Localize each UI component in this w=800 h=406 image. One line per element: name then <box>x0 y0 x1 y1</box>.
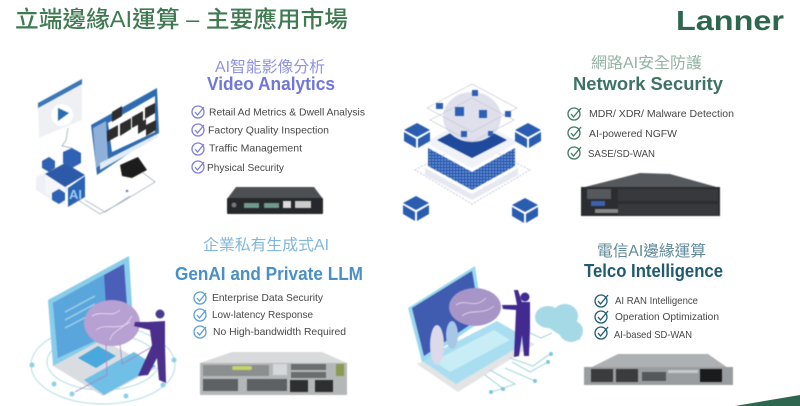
play panel <box>38 79 82 138</box>
device: 2U edge server <box>200 352 347 395</box>
logo: Lanner: Lanner <box>676 5 784 36</box>
item 2: AI-powered NGFW <box>589 128 677 140</box>
laptop base <box>53 338 157 396</box>
illustration: network security <box>403 84 541 223</box>
ring nodes <box>30 358 176 398</box>
keyboard <box>84 352 156 395</box>
heading zh: 網路AI安全防護 <box>591 54 703 72</box>
wire planes <box>427 84 517 142</box>
list <box>595 295 719 341</box>
corner cube 3 <box>403 196 429 221</box>
panel: GenAI <box>30 236 363 404</box>
item 3: No High-bandwidth Required <box>213 326 346 338</box>
item 1: MDR/ XDR/ Malware Detection <box>589 108 734 120</box>
laptop shadow <box>417 330 535 392</box>
panel: network security <box>403 54 734 223</box>
title: 立端邊緣AI運算 – 主要應用市場 <box>15 6 348 32</box>
keys <box>434 330 510 372</box>
orbit rings <box>31 326 175 404</box>
item 2: Factory Quality Inspection <box>208 124 329 136</box>
heading zh: 電信AI邊緣運算 <box>597 242 706 260</box>
circuit lines <box>62 128 155 214</box>
cloud <box>535 304 583 342</box>
device: edge appliance <box>227 187 323 214</box>
item 2: Low-latency Response <box>212 309 313 321</box>
floating cubes <box>436 90 511 137</box>
keyboard deck <box>421 321 530 384</box>
panel: video analytics <box>36 58 365 214</box>
item 3: SASE/SD-WAN <box>588 148 655 160</box>
item 1: AI RAN Intelligence <box>615 295 698 307</box>
corner cube 2 <box>515 123 541 148</box>
device: 1U telco server <box>584 354 733 385</box>
heading zh: 企業私有生成式AI <box>203 236 329 254</box>
heading en: GenAI and Private LLM <box>175 264 363 284</box>
illustration: GenAI <box>30 256 176 404</box>
screen <box>408 266 483 365</box>
touchpad <box>78 346 116 368</box>
item 3: AI-based SD-WAN <box>614 329 692 341</box>
corner accent <box>735 395 800 406</box>
item 1: Enterprise Data Security <box>212 292 324 304</box>
monitor <box>91 88 159 178</box>
heading en: Network Security <box>573 74 723 94</box>
heading zh: AI智能影像分析 <box>215 58 325 76</box>
list <box>194 292 346 338</box>
device: rack network appliance <box>581 173 720 216</box>
item 3 <box>568 147 655 160</box>
heading en: Telco Intelligence <box>584 261 723 281</box>
base dashed ring <box>415 140 530 204</box>
illustration: video analytics <box>36 79 159 214</box>
screen <box>48 256 133 366</box>
item 3: Traffic Management <box>209 142 302 154</box>
brain <box>75 300 150 392</box>
circuit lines <box>485 333 553 394</box>
AI cube: AI <box>69 187 82 202</box>
panel: telco <box>408 242 733 394</box>
person <box>134 310 166 383</box>
person <box>502 290 530 357</box>
brain <box>449 288 501 326</box>
item 1: Retail Ad Metrics & Dwell Analysis <box>209 106 365 118</box>
corner cube 1 <box>404 123 430 148</box>
brain <box>443 92 501 142</box>
item 2: Operation Optimization <box>615 311 719 323</box>
heading en: Video Analytics <box>207 74 335 94</box>
corner cube 4 <box>512 198 538 223</box>
server block <box>425 117 518 200</box>
list <box>568 108 734 160</box>
list <box>192 106 365 174</box>
illustration: telco <box>408 266 583 394</box>
item 4: Physical Security <box>207 162 285 174</box>
